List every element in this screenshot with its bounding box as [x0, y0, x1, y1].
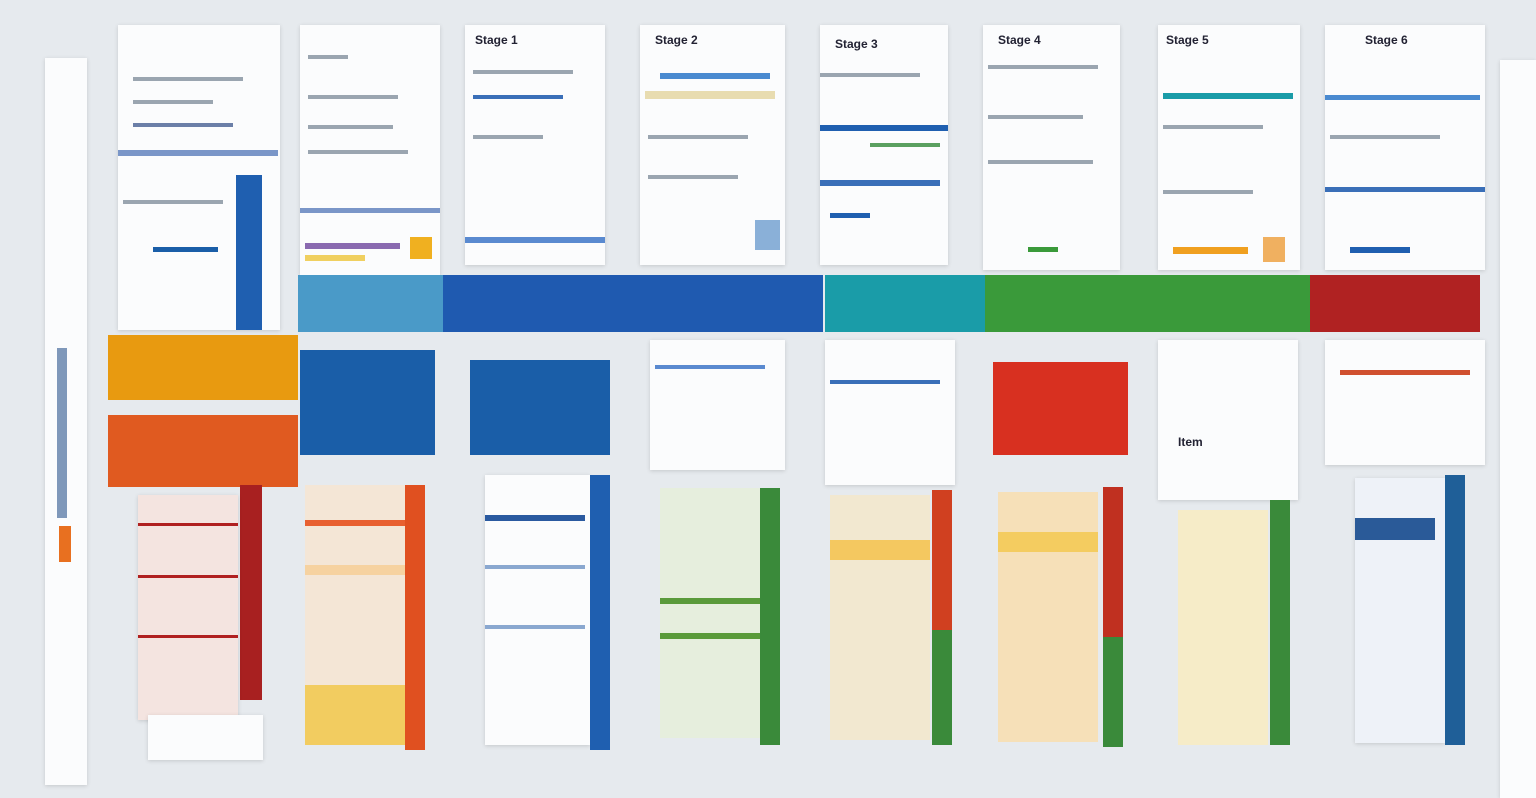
- right strip: [1500, 60, 1536, 798]
- column 7 lower: [1156, 340, 1300, 745]
- card 2: [300, 25, 440, 275]
- column 7 lower: Item: [1178, 435, 1203, 449]
- card 1: [118, 25, 280, 330]
- card 7: [1158, 25, 1300, 270]
- column 3 lower: [470, 360, 610, 750]
- card 3: Stage 1: [475, 33, 518, 47]
- card 7: Stage 5: [1166, 33, 1209, 47]
- card 4: Stage 2: [655, 33, 698, 47]
- icon: orange marker: [59, 526, 71, 562]
- column 4 lower: [648, 340, 786, 745]
- card 4: [640, 25, 785, 265]
- column 8 lower: [1324, 340, 1486, 746]
- column 2 lower: [300, 350, 435, 750]
- column 1 lower: [108, 335, 298, 762]
- column 5 lower: [824, 340, 956, 745]
- top cards row: [116, 24, 1486, 332]
- card 5: Stage 3: [835, 37, 878, 51]
- left vertical strip: [45, 58, 87, 785]
- column 6 lower: [993, 362, 1128, 747]
- card 8: Stage 6: [1365, 33, 1408, 47]
- rotated label: [57, 348, 67, 518]
- card 6: Stage 4: [998, 33, 1041, 47]
- card 5: [820, 25, 948, 265]
- card 6: [983, 25, 1120, 270]
- card 8: [1325, 25, 1485, 270]
- horizontal colour band: [298, 275, 1480, 332]
- card 3: [465, 25, 605, 265]
